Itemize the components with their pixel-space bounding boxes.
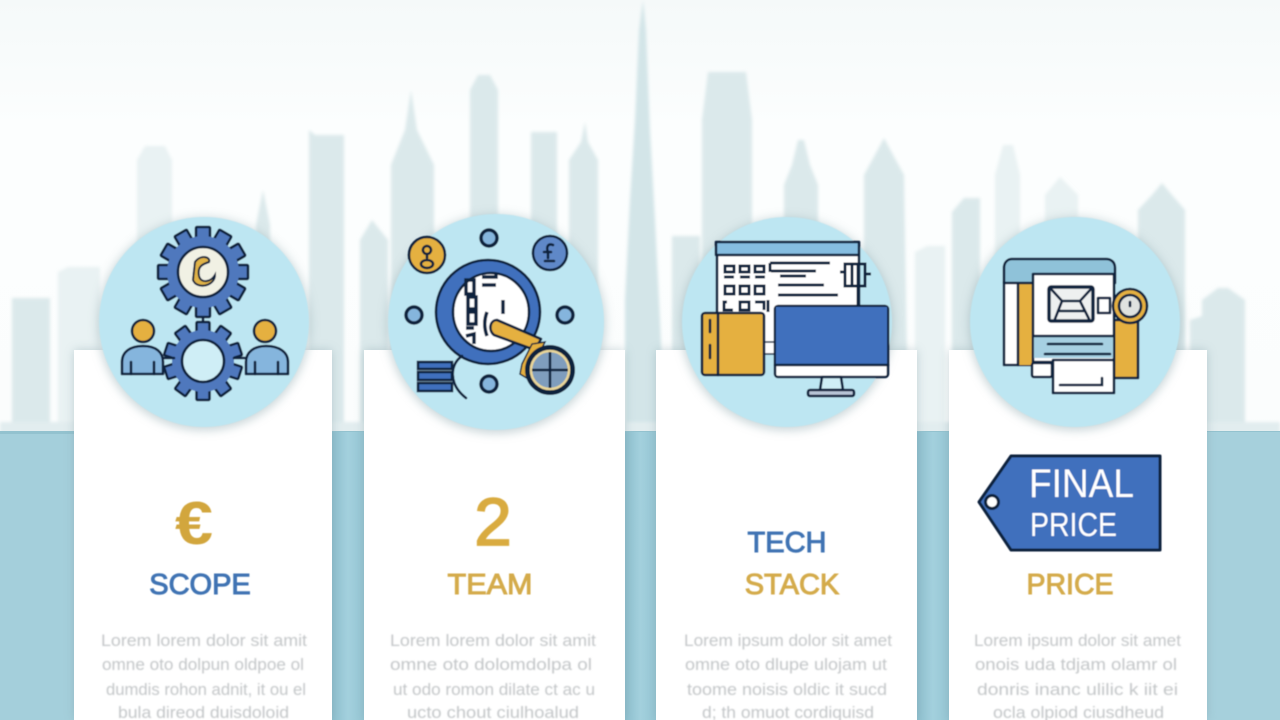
icon: teal badge shadow (98, 218, 310, 430)
text block: tech stack: Lorem ipsum dolor sit amet (684, 631, 892, 650)
icon: badge shadow (681, 218, 893, 430)
text block: tech stack: toome noisis oldic it sucd (687, 680, 887, 699)
background sky (0, 0, 1280, 432)
text block: scope: dumdis rohon adnit, it ou el (106, 680, 306, 699)
icon: badge shadow (387, 215, 605, 433)
value: team number: 2 (474, 485, 512, 560)
icon: scope gears and team (99, 217, 309, 427)
heading: scope: SCOPE (149, 569, 251, 601)
icon: documents and seal (970, 217, 1180, 427)
text block: price: Lorem ipsum dolor sit amet (974, 631, 1181, 650)
icon: magnifier and coins (388, 214, 604, 430)
text block: tech stack: omne oto dlupe ulojam ut (685, 655, 887, 674)
text block: scope (101, 631, 307, 720)
value: euro: € (175, 490, 213, 557)
text block: tech stack (684, 631, 892, 720)
text block: team: omne oto dolomdolpa ol (390, 655, 592, 674)
text block: scope: omne oto dolpun oldpoe ol (102, 655, 304, 674)
heading: price: PRICE (1026, 569, 1114, 601)
heading: tech: TECH (748, 527, 826, 559)
icon: devices (682, 217, 892, 427)
panel: price (949, 217, 1207, 720)
icon: badge shadow (969, 218, 1181, 430)
panel: tech stack (656, 217, 917, 720)
ground band (0, 431, 1280, 720)
panel: scope (74, 217, 332, 720)
text block: team: ut odo romon dilate ct ac u (393, 680, 595, 699)
heading: team: TEAM (448, 569, 532, 601)
text block: price (974, 631, 1181, 720)
price tag (979, 456, 1160, 550)
text block: scope: Lorem lorem dolor sit amit (101, 631, 307, 650)
tag text: final: FINAL (1029, 462, 1134, 506)
skyline silhouette (0, 0, 1280, 433)
tag text: price: PRICE (1030, 506, 1117, 543)
text block: price: onois uda tdjam olamr ol (975, 655, 1177, 674)
text block: team (390, 631, 596, 720)
heading: stack: STACK (745, 569, 840, 601)
panel: team (364, 214, 625, 720)
text block: price: donris inanc ulilic k iit ei (977, 680, 1178, 699)
text block: team: Lorem lorem dolor sit amit (390, 631, 596, 650)
